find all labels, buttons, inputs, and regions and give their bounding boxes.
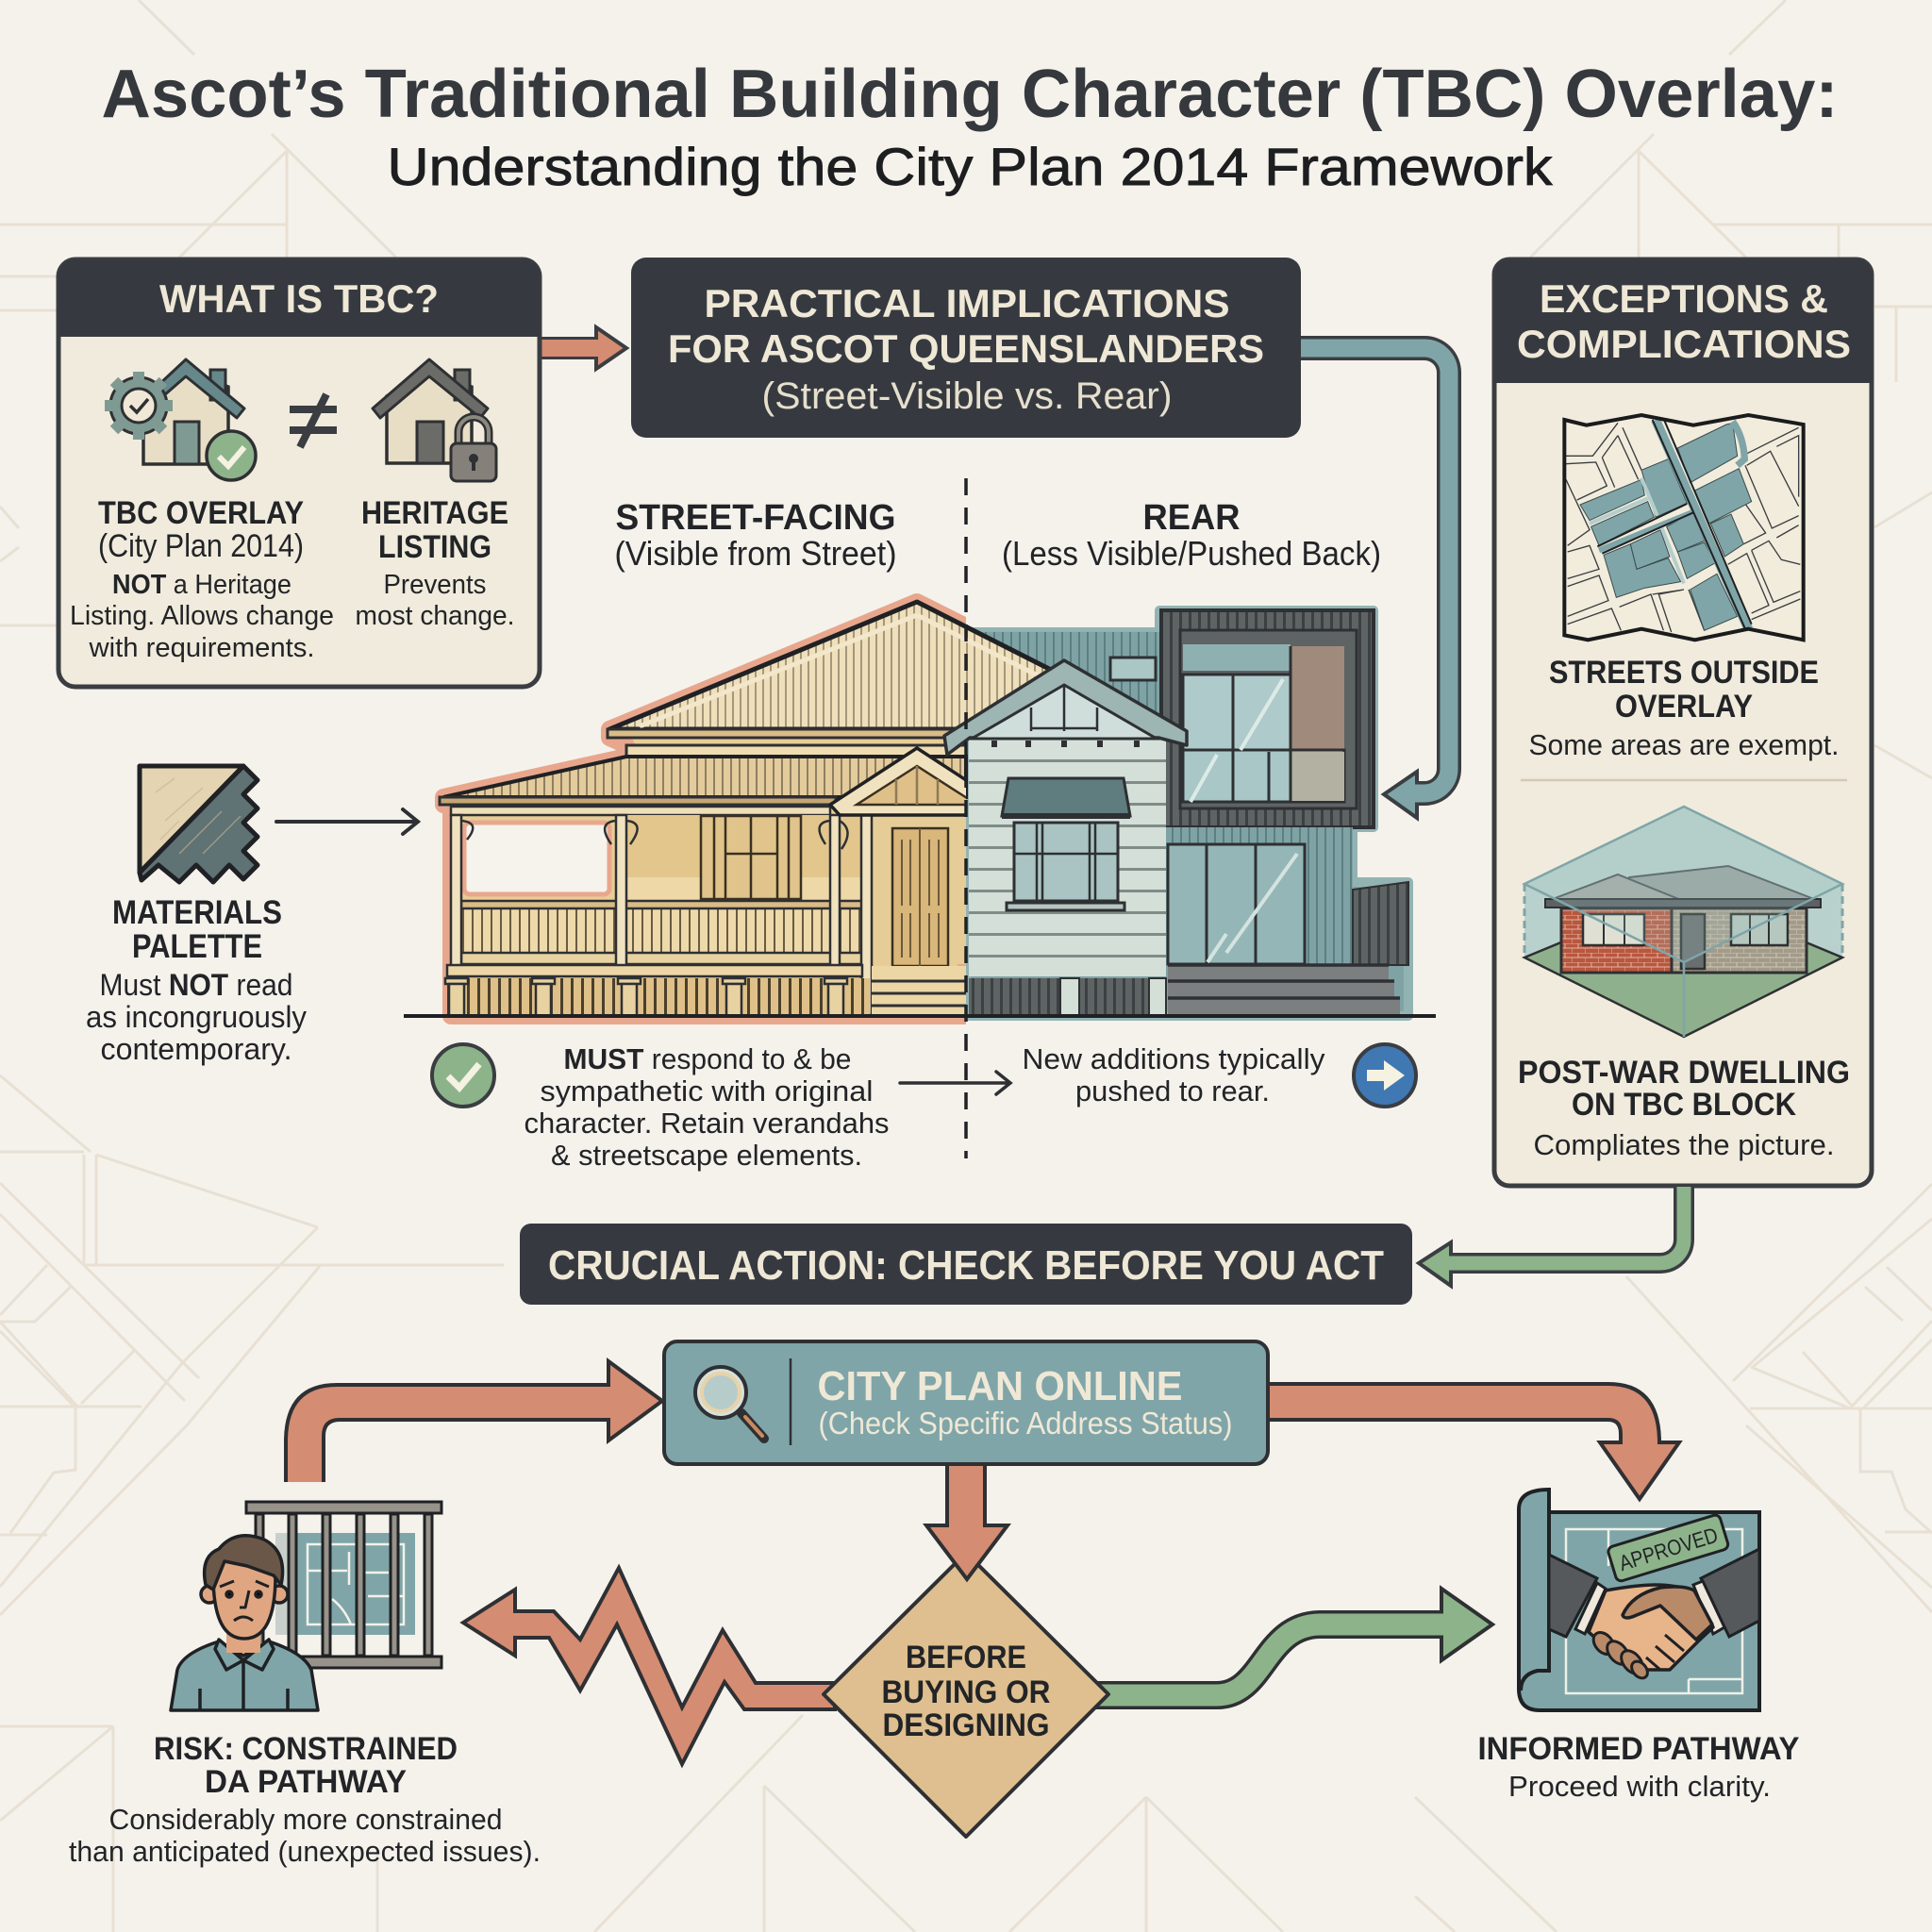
icon: constrained plans behind bars with worried person	[171, 1502, 441, 1710]
text: streets outside overlay: OVERLAY	[1615, 689, 1753, 724]
text: new additions: New additions typically	[1023, 1042, 1325, 1075]
arrow: front to rear	[900, 1072, 1010, 1094]
subtitle: Understanding the City Plan 2014 Framework	[387, 137, 1554, 196]
text: TBC overlay: with requirements.	[88, 633, 314, 663]
heading: rear	[1002, 498, 1381, 573]
text: heritage listing: most change.	[355, 601, 515, 631]
text: informed pathway: INFORMED PATHWAY	[1477, 1731, 1800, 1767]
text: must respond: MUST respond to & be	[564, 1042, 851, 1075]
icon: not equal sign	[290, 394, 337, 447]
panel: What is TBC	[58, 259, 540, 687]
panel: Practical Implications header	[631, 258, 1301, 438]
stamp: approved: APPROVED	[1616, 1523, 1721, 1575]
text: risk constrained DA pathway: Considerably more constrained	[109, 1803, 502, 1836]
panel heading: WHAT IS TBC?	[159, 276, 439, 321]
text: heritage listing: Prevents	[383, 570, 487, 600]
panel: City Plan Online	[664, 1341, 1268, 1464]
text: materials palette: as incongruously	[86, 1000, 307, 1034]
text: heritage listing: HERITAGE	[361, 495, 508, 531]
person	[171, 1536, 318, 1710]
heading: street-facing: STREET-FACING	[615, 498, 896, 538]
text: must respond: sympathetic with original	[540, 1074, 874, 1108]
house middle: cottage gable	[944, 660, 1187, 1016]
diamond: before buying or designing	[824, 1553, 1108, 1837]
icon: blue arrow	[1354, 1044, 1416, 1107]
text: risk constrained DA pathway: RISK: CONSTRAINED	[154, 1731, 458, 1767]
arrow: zigzag from diamond to risk	[463, 1568, 835, 1764]
text: post-war dwelling	[1518, 1055, 1850, 1161]
house rear: contemporary extension	[966, 610, 1408, 1016]
text: TBC overlay	[70, 495, 334, 663]
text: materials palette: contemporary.	[100, 1032, 292, 1066]
heading: street-facing	[615, 498, 896, 573]
arrow: What is TBC to Practical Implications	[540, 327, 626, 369]
text: must respond: & streetscape elements.	[551, 1139, 862, 1172]
text: materials palette: PALETTE	[132, 928, 262, 965]
text: streets outside overlay: STREETS OUTSIDE	[1549, 655, 1819, 691]
text: risk constrained DA pathway: DA PATHWAY	[205, 1764, 407, 1800]
text: TBC overlay: NOT a Heritage	[112, 570, 291, 600]
diamond: before buying or designing: DESIGNING	[883, 1707, 1049, 1743]
panel: Practical Implications header: (Street-Visible vs. Rear)	[762, 375, 1172, 417]
arrow: City Plan down to diamond	[926, 1464, 1008, 1579]
arrow: green curve from diamond to informed pathway	[1094, 1589, 1492, 1695]
text: risk constrained DA pathway	[69, 1731, 541, 1868]
panel: Exceptions and Complications	[1494, 259, 1872, 1186]
panel heading: EXCEPTIONS &	[1540, 276, 1828, 321]
icon: materials palette swatch	[140, 766, 258, 882]
heading: rear: (Less Visible/Pushed Back)	[1002, 534, 1381, 573]
icon: overlay map	[1564, 415, 1804, 640]
arrow: risk to City Plan	[286, 1361, 662, 1482]
arrow: Practical Implications down to house rear	[1301, 348, 1449, 818]
heading: rear: REAR	[1143, 498, 1240, 538]
text: new additions	[1023, 1042, 1325, 1108]
icon: magnifying glass	[695, 1367, 764, 1439]
text: post-war dwelling: POST-WAR DWELLING	[1518, 1055, 1850, 1091]
panel: Exceptions and Complications: COMPLICATIONS	[1517, 322, 1851, 366]
icon: green check	[432, 1044, 494, 1107]
text: streets outside overlay: Some areas are exempt.	[1528, 728, 1840, 761]
icon: post-war dwelling on block	[1524, 807, 1842, 1037]
text: TBC overlay: TBC OVERLAY	[98, 495, 304, 531]
text: heritage listing	[355, 495, 515, 631]
text: new additions: pushed to rear.	[1075, 1074, 1270, 1108]
text: informed pathway	[1477, 1731, 1800, 1803]
text: materials palette	[86, 894, 307, 1066]
icon: approved plans with handshake	[1519, 1490, 1759, 1710]
panel: City Plan Online: (Check Specific Address Status)	[819, 1406, 1232, 1441]
text: post-war dwelling: ON TBC BLOCK	[1572, 1087, 1796, 1123]
diamond: before buying or designing: BEFORE	[906, 1640, 1026, 1675]
heading: street-facing: (Visible from Street)	[615, 534, 896, 573]
text: must respond	[525, 1042, 889, 1172]
banner: crucial action	[520, 1224, 1412, 1305]
icon: heritage house with lock	[373, 359, 496, 481]
banner: crucial action: CRUCIAL ACTION: CHECK BEFORE YOU ACT	[548, 1242, 1384, 1289]
diamond: before buying or designing: BUYING OR	[881, 1674, 1051, 1710]
text: heritage listing: LISTING	[378, 529, 491, 565]
arrow: materials to house	[276, 809, 418, 834]
text: must respond: character. Retain verandahs	[525, 1107, 889, 1140]
arrow: Exceptions to Crucial Action	[1419, 1187, 1684, 1286]
panel: Practical Implications header: PRACTICAL IMPLICATIONS	[704, 281, 1230, 325]
illustration: house section, Queenslander front and contemporary rear	[404, 602, 1436, 1016]
panel: City Plan Online: CITY PLAN ONLINE	[817, 1363, 1183, 1409]
text: TBC overlay: (City Plan 2014)	[98, 528, 304, 564]
text: risk constrained DA pathway: than anticipated (unexpected issues).	[69, 1835, 541, 1868]
text: streets outside overlay	[1528, 655, 1840, 761]
house front: Queenslander	[440, 602, 1055, 1016]
text: materials palette: MATERIALS	[112, 894, 282, 931]
text: post-war dwelling: Compliates the picture.	[1534, 1128, 1834, 1161]
text: TBC overlay: Listing. Allows change	[70, 601, 334, 631]
panel: Practical Implications header: FOR ASCOT QUEENSLANDERS	[668, 326, 1264, 371]
icon: TBC overlay house with gear and check	[105, 359, 256, 480]
title: Ascot’s Traditional Building Character (TBC) Overlay:	[102, 57, 1838, 132]
text: materials palette: Must NOT read	[100, 968, 292, 1002]
divider: dashed street-facing/rear line	[964, 478, 968, 1158]
text: informed pathway: Proceed with clarity.	[1508, 1770, 1771, 1803]
arrow: City Plan to informed pathway	[1264, 1384, 1679, 1499]
